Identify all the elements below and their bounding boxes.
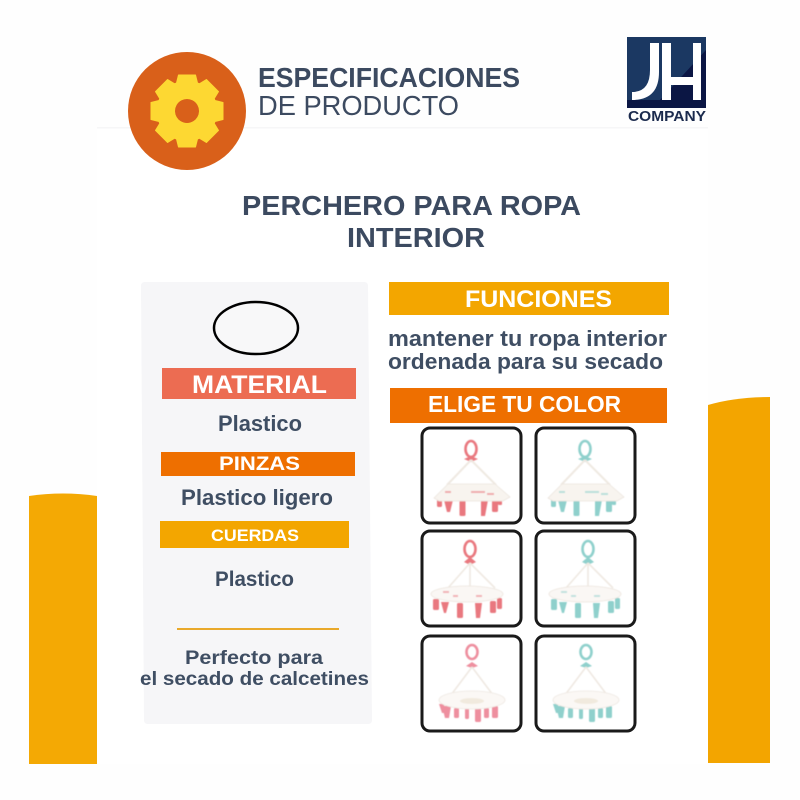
material label	[162, 368, 356, 399]
cuerdas label	[160, 521, 349, 548]
icon: gear	[151, 75, 223, 147]
color tile: pink round hanger	[422, 531, 521, 626]
funciones text: ordenada para su secado	[388, 349, 663, 374]
header title: DE PRODUCTO	[258, 90, 459, 121]
color tile: teal rectangular hanger	[536, 428, 635, 523]
elige tu color heading: ELIGE TU COLOR	[428, 391, 621, 417]
funciones heading: FUNCIONES	[465, 286, 612, 313]
product title: PERCHERO PARA ROPA	[242, 190, 581, 221]
pinzas label: PINZAS	[219, 454, 300, 475]
pinzas label	[161, 452, 355, 476]
note: el secado de calcetines	[140, 669, 369, 690]
JH company logo: COMPANY	[628, 109, 706, 125]
funciones heading	[389, 282, 669, 315]
color tile: pink rectangular hanger	[422, 428, 521, 523]
icon: gear badge	[128, 52, 246, 170]
funciones text: mantener tu ropa interior	[388, 326, 667, 351]
funciones text	[388, 326, 667, 374]
color tile: light teal round hanger	[536, 636, 635, 731]
pinzas value: Plastico ligero	[181, 485, 333, 510]
cuerdas label: CUERDAS	[211, 526, 299, 545]
left orange side bar	[29, 494, 97, 764]
note: Perfecto para	[185, 648, 323, 669]
JH company logo	[627, 37, 706, 125]
cuerdas value: Plastico	[215, 568, 294, 591]
header title	[258, 62, 520, 121]
right orange side bar	[708, 397, 770, 763]
product title: INTERIOR	[347, 222, 485, 253]
note	[140, 648, 369, 690]
oval swatch	[214, 302, 298, 354]
elige tu color heading	[390, 388, 667, 423]
color tile: teal round hanger	[536, 531, 635, 626]
material label: MATERIAL	[192, 371, 327, 399]
panel: specifications	[140, 282, 372, 724]
white main panel	[97, 128, 708, 764]
header title: ESPECIFICACIONES	[258, 62, 520, 93]
material value: Plastico	[218, 411, 302, 436]
color tile: light pink round hanger	[422, 636, 521, 731]
product title	[242, 190, 581, 253]
